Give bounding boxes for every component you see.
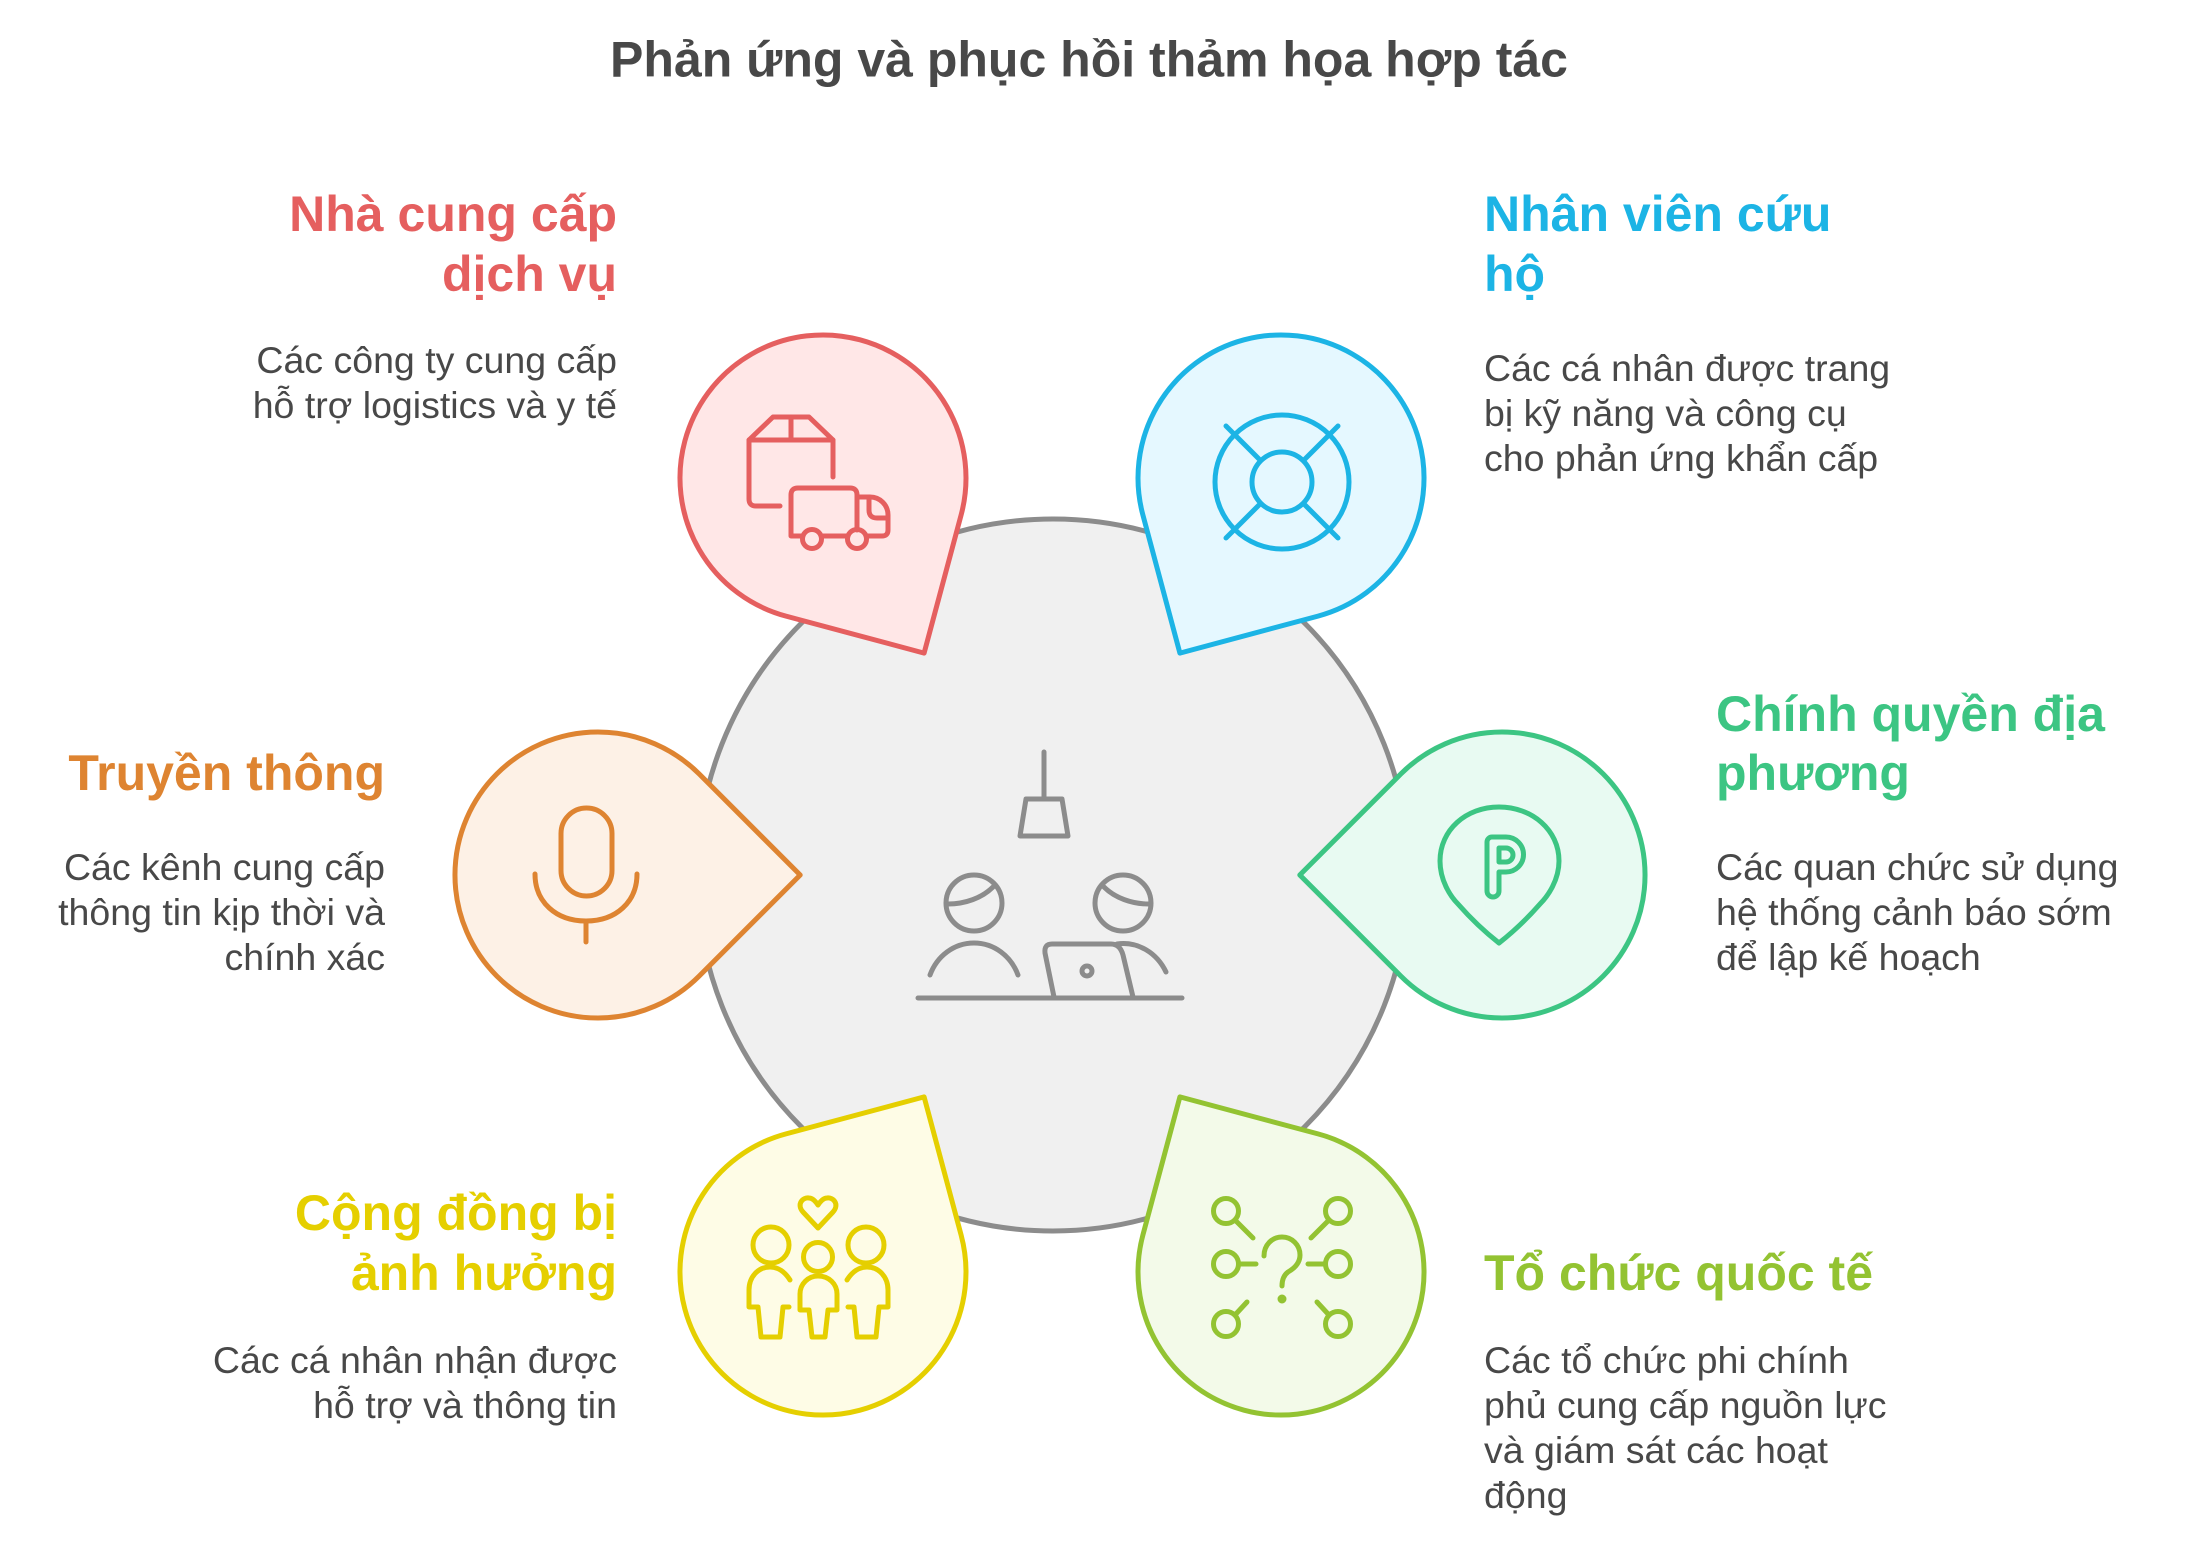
lime teardrop (1056, 1025, 1476, 1467)
central circle (697, 519, 1409, 1231)
description: service providers: Các công ty cung cấp (256, 339, 617, 381)
icon: collaboration desk (918, 752, 1182, 998)
red teardrop (628, 283, 1048, 725)
icon: microphone (535, 808, 637, 942)
description: rescue workers: Các cá nhân được trang (1484, 347, 1890, 389)
description: media: thông tin kịp thời và (58, 891, 385, 933)
description: international organizations: Các tổ chức phi chính (1484, 1339, 1849, 1381)
panel: international organizations (1056, 1025, 1886, 1516)
icon: box and truck (749, 417, 888, 548)
description: affected communities: Các cá nhân nhận được (213, 1339, 617, 1381)
heading: international organizations: Tổ chức quốc tế (1484, 1245, 1873, 1301)
description: affected communities: hỗ trợ và thông tin (313, 1384, 617, 1426)
heading: service providers: Nhà cung cấp (289, 186, 617, 242)
panel: service providers (253, 186, 1048, 725)
description: local government: hệ thống cảnh báo sớm (1716, 891, 2112, 933)
description: international organizations: và giám sát các hoạt (1484, 1429, 1829, 1471)
description: service providers: hỗ trợ logistics và y tế (253, 384, 617, 426)
icon: lifebuoy (1215, 415, 1349, 549)
icon: family with heart (749, 1198, 888, 1337)
description: rescue workers: bị kỹ năng và công cụ (1484, 392, 1847, 434)
heading: media: Truyền thông (68, 745, 385, 801)
description: international organizations: phủ cung cấp nguồn lực (1484, 1384, 1886, 1426)
heading: local government: Chính quyền địa (1716, 686, 2106, 742)
title: Phản ứng và phục hồi thảm họa hợp tác (610, 32, 1568, 88)
description: international organizations: động (1484, 1474, 1567, 1516)
heading: service providers: dịch vụ (442, 246, 617, 302)
icon: question network (1214, 1198, 1350, 1336)
panel: media (58, 732, 800, 1018)
heading: local government: phương (1716, 745, 1910, 801)
green teardrop (1300, 732, 1645, 1018)
heading: affected communities: ảnh hưởng (351, 1245, 617, 1301)
panel: affected communities (213, 1025, 1048, 1467)
description: local government: để lập kế hoạch (1716, 936, 1981, 978)
heading: rescue workers: Nhân viên cứu (1484, 186, 1831, 242)
blue teardrop (1056, 283, 1476, 725)
panel: local government (1300, 686, 2119, 1018)
orange teardrop (455, 732, 800, 1018)
description: rescue workers: cho phản ứng khẩn cấp (1484, 437, 1878, 479)
heading: affected communities: Cộng đồng bị (295, 1185, 617, 1241)
panel: rescue workers (1056, 186, 1890, 725)
description: local government: Các quan chức sử dụng (1716, 846, 2119, 888)
yellow teardrop (628, 1025, 1048, 1467)
description: media: Các kênh cung cấp (64, 846, 385, 888)
description: media: chính xác (224, 936, 385, 978)
heading: rescue workers: hộ (1484, 246, 1545, 302)
icon: parking pin (1440, 807, 1559, 943)
